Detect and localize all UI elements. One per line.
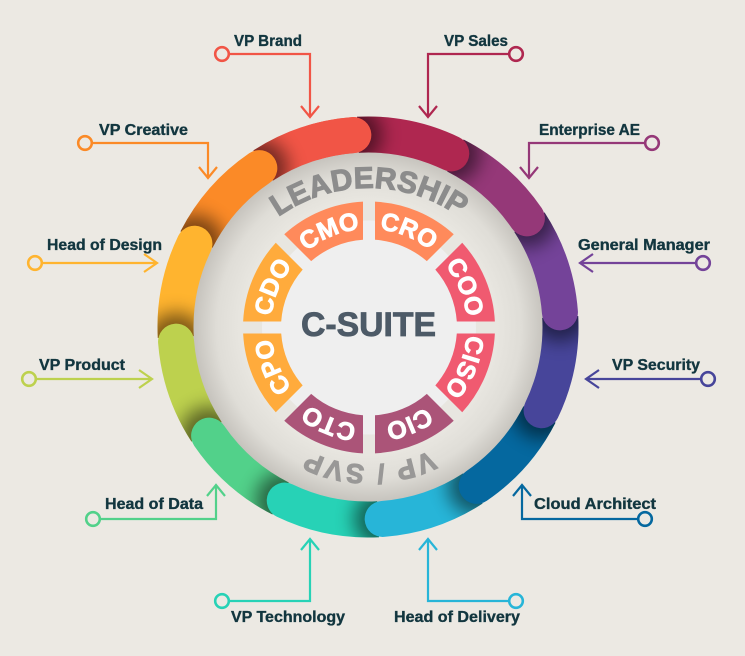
callout: Enterprise AE: Enterprise AE — [539, 122, 640, 139]
callout: Head of Data — [86, 485, 225, 526]
callout: Head of Delivery: Head of Delivery — [394, 609, 520, 626]
callout: General Manager — [578, 237, 710, 272]
segment: dark blue Cloud Architect — [436, 406, 556, 519]
title: C-SUITE: C-SUITE — [301, 306, 436, 344]
segment: crimson VP Sales — [357, 116, 490, 186]
heading: LEADERSHIP arc text: LEADERSHIP — [268, 166, 468, 216]
segment: light blue Head of Delivery — [342, 474, 483, 538]
segment: mint Head of Data — [176, 396, 289, 514]
segment: orange VP Creative — [180, 135, 300, 248]
callout: VP Technology: VP Technology — [231, 609, 345, 626]
callout: VP Sales — [419, 33, 523, 117]
callout: Cloud Architect: Cloud Architect — [534, 496, 656, 513]
ring of 12 coloured role segments — [158, 116, 578, 538]
callout: VP Creative: VP Creative — [99, 122, 188, 139]
text: CPO: CPO — [256, 340, 289, 394]
callout: VP Product: VP Product — [39, 357, 125, 374]
callout: VP Security — [586, 357, 715, 388]
text: CMO: CMO — [300, 213, 358, 248]
callout: General Manager: General Manager — [578, 237, 710, 254]
callout: Cloud Architect — [513, 485, 656, 526]
wedge: CRO — [375, 202, 454, 261]
segment: olive VP Product — [158, 300, 222, 442]
wedge labels — [255, 213, 484, 440]
callout: VP Technology — [215, 539, 345, 626]
callout: VP Brand: VP Brand — [234, 33, 302, 50]
wedge: CDO — [243, 243, 303, 322]
callout: Head of Data: Head of Data — [105, 496, 203, 513]
wedge: CTO — [284, 394, 363, 453]
wedge: CMO — [284, 202, 363, 261]
segment: red cap overlapping crimson — [306, 116, 393, 160]
callout: Enterprise AE — [520, 122, 659, 178]
wedge: COO — [435, 243, 495, 322]
callout: VP Brand — [215, 33, 319, 117]
callout: Head of Design: Head of Design — [47, 237, 162, 254]
segment: purple General Manager — [514, 212, 578, 351]
callout: VP Product — [22, 357, 152, 388]
text: CIO: CIO — [388, 410, 432, 440]
text: CRO: CRO — [382, 213, 436, 247]
segment: magenta Enterprise AE — [447, 140, 560, 258]
segment: teal VP Technology — [244, 466, 379, 538]
segment: yellow Head of Design — [158, 203, 228, 338]
panel: centre light circle — [262, 220, 476, 434]
callout: Head of Design — [28, 237, 162, 272]
text: CISO: CISO — [447, 336, 484, 398]
panel: inner grey disc — [192, 150, 546, 504]
callout: VP Sales: VP Sales — [444, 33, 508, 50]
callout: Head of Delivery — [394, 539, 523, 626]
text: CTO: CTO — [302, 408, 354, 440]
segment: indigo VP Security — [508, 316, 578, 450]
callout: VP Security: VP Security — [612, 357, 700, 374]
wedge: CPO — [243, 334, 303, 412]
text: COO: COO — [448, 258, 483, 315]
segment: red VP Brand — [253, 115, 372, 182]
text: CDO: CDO — [255, 259, 290, 314]
heading: VP / SVP arc text: VP / SVP — [304, 452, 439, 485]
C-suite role wedges — [243, 202, 495, 453]
wedge: CISO — [435, 334, 495, 412]
callout: VP Creative — [78, 122, 217, 178]
wedge: CIO — [375, 394, 454, 453]
